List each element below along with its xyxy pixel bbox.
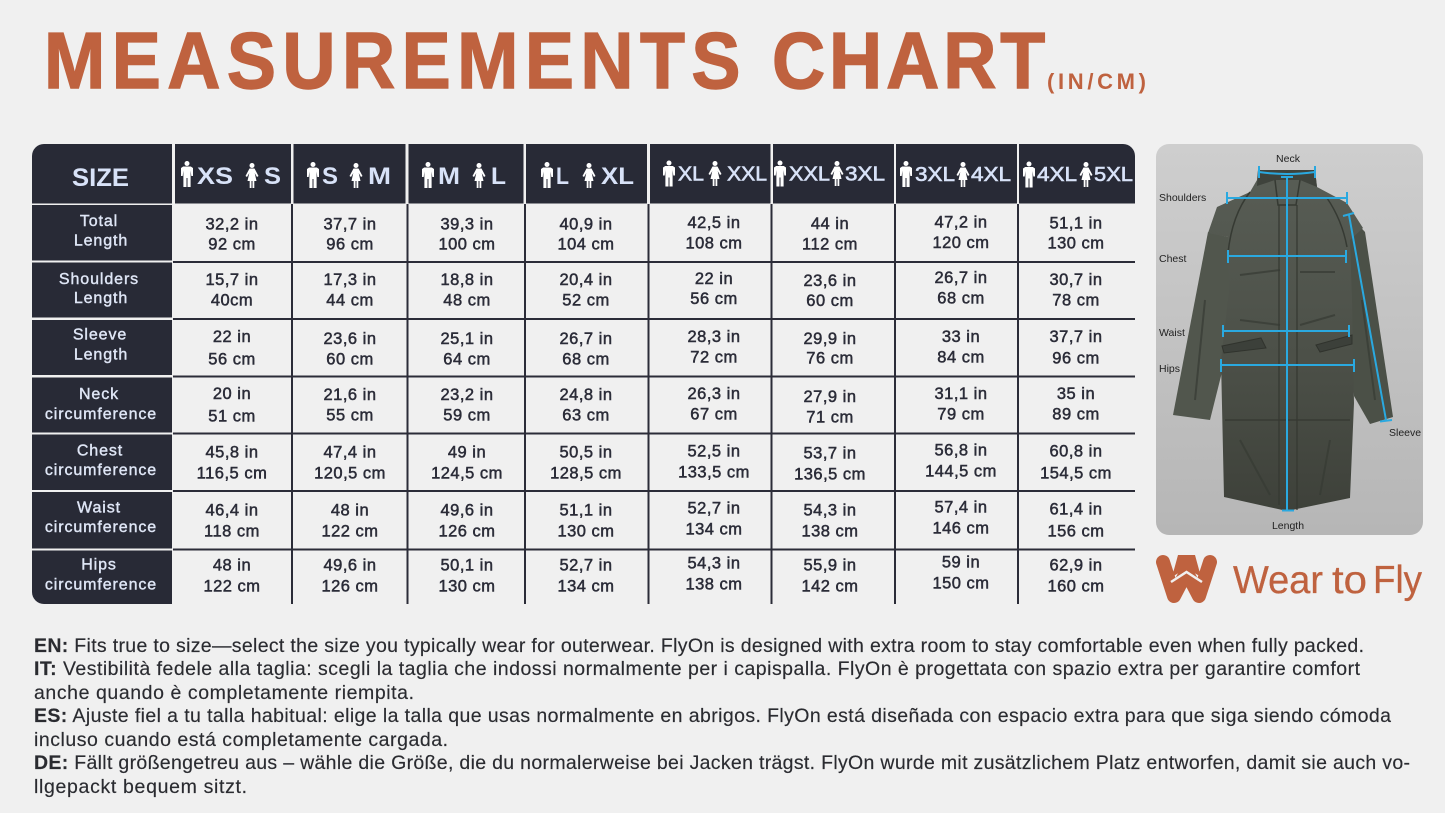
row: sleeve length values: 22 in <box>213 328 251 346</box>
header: XXL 3XL: 3XL <box>845 164 885 186</box>
row: waist circumference values: 49,6 in <box>440 502 494 520</box>
table grid lines <box>173 204 1135 604</box>
row: shoulders length values: 23,6 in <box>803 272 857 290</box>
diagram labels: Length <box>1272 520 1304 532</box>
row: total length values: 104 cm <box>557 236 615 254</box>
row: shoulders length values: 78 cm <box>1052 292 1100 310</box>
row: chest circumference values: 128,5 cm <box>550 464 622 482</box>
note: English: EN: Fits true to size—select the size you typically wear for outerwear. FlyOn is designed with extra room to stay comfortable even when fully packed. <box>34 635 1364 657</box>
row: total length values: 42,5 in <box>687 214 741 232</box>
row: chest circumference values: 136,5 cm <box>794 466 866 484</box>
header: XXL 3XL: XXL <box>789 164 830 186</box>
diagram labels: Waist <box>1159 327 1185 339</box>
header: XS S: XS <box>197 163 233 190</box>
row: neck circumference values: 79 cm <box>937 406 985 424</box>
row: chest circumference values: 116,5 cm <box>197 464 267 482</box>
row: chest circumference values <box>197 442 1112 484</box>
label: shoulders length: Shoulders <box>59 271 139 288</box>
row: hips circumference values: 59 in <box>942 554 980 572</box>
row: sleeve length values: 33 in <box>942 328 980 346</box>
row: waist circumference values: 57,4 in <box>934 498 988 516</box>
note: German <box>34 752 1410 798</box>
title <box>44 16 1045 106</box>
row: shoulders length values <box>205 269 1103 310</box>
note: German: llgepackt bequem sitzt. <box>34 776 247 798</box>
note: Italian <box>34 658 1361 704</box>
row: waist circumference values: 54,3 in <box>803 502 857 520</box>
row: waist circumference values: 51,1 in <box>559 502 613 520</box>
row: chest circumference values: 50,5 in <box>559 444 613 462</box>
multilingual fit notes <box>34 635 1410 798</box>
header: L XL: L <box>556 163 569 190</box>
row: total length values: 44 in <box>811 215 849 233</box>
title: MEASUREMENTS <box>44 16 740 106</box>
row: waist circumference values: 134 cm <box>685 520 743 538</box>
row: shoulders length values: 15,7 in <box>205 271 259 289</box>
row: neck circumference values: 71 cm <box>806 408 854 426</box>
header: XL XXL <box>650 144 770 204</box>
row: neck circumference values: 26,3 in <box>687 385 741 403</box>
header: M L: M <box>438 163 460 190</box>
row: total length values: 47,2 in <box>934 214 988 232</box>
header: XS S <box>175 144 291 204</box>
wordmark: Fly <box>1373 559 1422 602</box>
row: waist circumference values: 46,4 in <box>205 502 259 520</box>
row: sleeve length values: 76 cm <box>806 350 854 368</box>
row: chest circumference values: 124,5 cm <box>431 464 503 482</box>
row: sleeve length values: 28,3 in <box>687 328 741 346</box>
row: hips circumference values: 138 cm <box>685 576 743 594</box>
row: chest circumference values: 60,8 in <box>1049 442 1103 460</box>
row: hips circumference values: 130 cm <box>438 578 496 596</box>
row: shoulders length values: 30,7 in <box>1049 271 1103 289</box>
panel: jacket measurement diagram <box>1156 144 1423 535</box>
row: hips circumference values: 50,1 in <box>440 556 494 574</box>
row: chest circumference values: 45,8 in <box>205 444 259 462</box>
row: waist circumference values <box>204 498 1105 540</box>
row: shoulders length values: 48 cm <box>443 292 491 310</box>
row: total length values: 51,1 in <box>1049 214 1103 232</box>
row: neck circumference values <box>208 385 1100 426</box>
diagram labels <box>1159 153 1421 532</box>
row: sleeve length values: 37,7 in <box>1049 328 1103 346</box>
header: 3XL 4XL: 3XL <box>915 164 955 186</box>
note: Spanish: ES: Ajuste fiel a tu talla habitual: elige la talla que usas normalmente en abrigos. FlyOn está diseñada con espacio extra para que siga siendo cómoda <box>34 705 1391 727</box>
row: shoulders length values: 18,8 in <box>440 271 494 289</box>
note: Spanish: incluso cuando está completamente cargada. <box>34 729 448 751</box>
row: hips circumference values: 62,9 in <box>1049 556 1103 574</box>
label: neck circumference: circumference <box>45 406 157 423</box>
header: M L: L <box>491 163 506 190</box>
label: waist circumference <box>32 492 172 548</box>
row: hips circumference values: 142 cm <box>801 578 859 596</box>
row: total length values: 112 cm <box>802 236 858 254</box>
header: 3XL 4XL <box>896 144 1017 204</box>
header: L XL <box>526 144 647 204</box>
row: shoulders length values: 60 cm <box>806 292 854 310</box>
row: sleeve length values: 68 cm <box>562 350 610 368</box>
row: chest circumference values: 133,5 cm <box>678 464 750 482</box>
row: total length values: 37,7 in <box>323 216 377 234</box>
row: shoulders length values: 22 in <box>695 270 733 288</box>
note: Spanish <box>34 705 1391 751</box>
label: total length: Total <box>80 213 118 230</box>
logo: Wear to Fly <box>1163 555 1422 602</box>
row: total length values: 39,3 in <box>440 216 494 234</box>
row: hips circumference values: 122 cm <box>203 578 261 596</box>
row: sleeve length values: 64 cm <box>443 350 491 368</box>
header: S M: M <box>368 163 391 190</box>
header: M L <box>408 144 524 204</box>
row: waist circumference values: 48 in <box>331 502 369 520</box>
note: German: DE: Fällt größengetreu aus – wähle die Größe, die du normalerweise bei Jacken trägst. FlyOn wurde mit zusätzlichem Platz entworfen, damit sie auch vo- <box>34 752 1410 774</box>
header: 4XL 5XL: 5XL <box>1094 164 1133 186</box>
row: waist circumference values: 156 cm <box>1047 522 1105 540</box>
row: total length values: 100 cm <box>438 236 496 254</box>
label: sleeve length: Length <box>74 346 128 364</box>
row: waist circumference values: 52,7 in <box>687 500 741 518</box>
row: total length values: 96 cm <box>326 236 374 254</box>
row: neck circumference values: 55 cm <box>326 406 374 424</box>
row: neck circumference values: 24,8 in <box>559 386 613 404</box>
row: total length values: 108 cm <box>685 234 743 252</box>
row: waist circumference values: 146 cm <box>932 520 990 538</box>
wordmark <box>1233 559 1422 602</box>
icon: W mark <box>1163 555 1210 596</box>
row: shoulders length values: 17,3 in <box>323 271 377 289</box>
header: size: SIZE <box>72 164 129 192</box>
row: chest circumference values: 144,5 cm <box>925 462 997 480</box>
row: shoulders length values: 56 cm <box>690 290 738 308</box>
unit note: (IN/CM) <box>1047 69 1146 94</box>
row: chest circumference values: 47,4 in <box>323 444 377 462</box>
label: shoulders length: Length <box>74 290 128 307</box>
diagram labels: Hips <box>1159 363 1180 375</box>
row: hips circumference values <box>203 554 1105 596</box>
row: hips circumference values: 134 cm <box>557 578 615 596</box>
label: sleeve length: Sleeve <box>73 326 127 344</box>
header: XL XXL: XL <box>678 164 704 186</box>
label: hips circumference: Hips <box>81 556 117 574</box>
wordmark: Wear <box>1233 559 1323 602</box>
row: neck circumference values: 89 cm <box>1052 406 1100 424</box>
label: chest circumference: Chest <box>77 442 123 460</box>
row: neck circumference values: 63 cm <box>562 406 610 424</box>
note: Italian: anche quando è completamente riempita. <box>34 682 414 704</box>
row: waist circumference values: 122 cm <box>321 522 379 540</box>
row: hips circumference values: 52,7 in <box>559 556 613 574</box>
row: waist circumference values: 118 cm <box>204 522 260 540</box>
row: hips circumference values: 160 cm <box>1047 578 1105 596</box>
row: chest circumference values: 154,5 cm <box>1040 464 1112 482</box>
row: sleeve length values: 84 cm <box>937 348 985 366</box>
row: chest circumference values: 49 in <box>448 444 486 462</box>
row: sleeve length values: 23,6 in <box>323 330 377 348</box>
row: hips circumference values: 54,3 in <box>687 554 741 572</box>
row: sleeve length values: 29,9 in <box>803 330 857 348</box>
header: size <box>32 144 172 204</box>
row: sleeve length values: 56 cm <box>208 350 256 368</box>
label: hips circumference: circumference <box>45 576 157 594</box>
row: chest circumference values: 56,8 in <box>934 442 988 460</box>
row: total length values <box>205 214 1105 254</box>
row: hips circumference values: 49,6 in <box>323 556 377 574</box>
row: shoulders length values: 20,4 in <box>559 271 613 289</box>
row: chest circumference values: 52,5 in <box>687 442 741 460</box>
blue measurement lines <box>1221 166 1392 510</box>
row: waist circumference values: 130 cm <box>557 522 615 540</box>
header: XL XXL: XXL <box>727 164 767 186</box>
row: sleeve length values: 72 cm <box>690 348 738 366</box>
row: total length values: 120 cm <box>932 234 990 252</box>
header: XXL 3XL <box>773 144 894 204</box>
header row <box>32 144 1135 204</box>
label: waist circumference: Waist <box>77 500 121 516</box>
row: sleeve length values <box>208 328 1103 368</box>
label: waist circumference: circumference <box>45 519 157 536</box>
header: XS S: S <box>264 163 281 190</box>
diagram labels: Sleeve <box>1389 427 1421 439</box>
row: chest circumference values: 53,7 in <box>803 444 857 462</box>
label: total length: Length <box>74 232 128 250</box>
row: hips circumference values: 126 cm <box>321 578 379 596</box>
row: chest circumference values: 120,5 cm <box>314 464 386 482</box>
row: total length values: 130 cm <box>1047 234 1105 252</box>
row: shoulders length values: 68 cm <box>937 290 985 308</box>
label: neck circumference <box>32 378 172 432</box>
row: hips circumference values: 48 in <box>213 556 251 574</box>
header: 4XL 5XL <box>1019 144 1135 204</box>
row: neck circumference values: 23,2 in <box>440 386 494 404</box>
row: neck circumference values: 35 in <box>1057 385 1095 403</box>
row: sleeve length values: 26,7 in <box>559 330 613 348</box>
label: hips circumference <box>32 550 172 604</box>
row: sleeve length values: 60 cm <box>326 350 374 368</box>
row: neck circumference values: 59 cm <box>443 406 491 424</box>
label: sleeve length <box>32 320 172 375</box>
row: shoulders length values: 40cm <box>211 292 253 310</box>
row: hips circumference values: 55,9 in <box>803 556 857 574</box>
row: neck circumference values: 21,6 in <box>323 386 377 404</box>
row: waist circumference values: 126 cm <box>438 522 496 540</box>
diagram labels: Neck <box>1276 153 1301 165</box>
header: S M <box>294 144 406 204</box>
title: CHART <box>772 16 1045 106</box>
row: neck circumference values: 67 cm <box>690 406 738 424</box>
header: 4XL 5XL: 4XL <box>1037 164 1077 186</box>
diagram labels: Shoulders <box>1159 192 1206 204</box>
row: neck circumference values: 31,1 in <box>934 385 988 403</box>
row labels <box>32 205 172 604</box>
row: waist circumference values: 138 cm <box>801 522 859 540</box>
header: S M: S <box>322 163 338 190</box>
row: hips circumference values: 150 cm <box>932 574 990 592</box>
label: total length <box>32 205 172 260</box>
size table <box>32 144 1135 604</box>
label: chest circumference <box>32 434 172 490</box>
note: Italian: IT: Vestibilità fedele alla taglia: scegli la taglia che indossi normalmente per i capispalla. FlyOn è progettata con spazio extra per garantire comfort <box>34 658 1361 680</box>
row: total length values: 32,2 in <box>205 216 259 234</box>
row: waist circumference values: 61,4 in <box>1049 500 1103 518</box>
label: neck circumference: Neck <box>79 386 119 403</box>
jacket illustration <box>1173 170 1393 511</box>
header: L XL: XL <box>601 163 634 190</box>
row: shoulders length values: 44 cm <box>326 292 374 310</box>
row: shoulders length values: 52 cm <box>562 292 610 310</box>
row: neck circumference values: 20 in <box>213 385 251 403</box>
row: total length values: 40,9 in <box>559 216 613 234</box>
header: 3XL 4XL: 4XL <box>971 164 1011 186</box>
row: sleeve length values: 96 cm <box>1052 350 1100 368</box>
label: chest circumference: circumference <box>45 462 157 479</box>
row: shoulders length values: 26,7 in <box>934 269 988 287</box>
row: sleeve length values: 25,1 in <box>440 330 494 348</box>
diagram labels: Chest <box>1159 253 1187 265</box>
wordmark: to <box>1332 559 1367 602</box>
row: neck circumference values: 27,9 in <box>803 388 857 406</box>
row: total length values: 92 cm <box>208 236 256 254</box>
row: neck circumference values: 51 cm <box>208 408 256 426</box>
label: shoulders length <box>32 262 172 318</box>
